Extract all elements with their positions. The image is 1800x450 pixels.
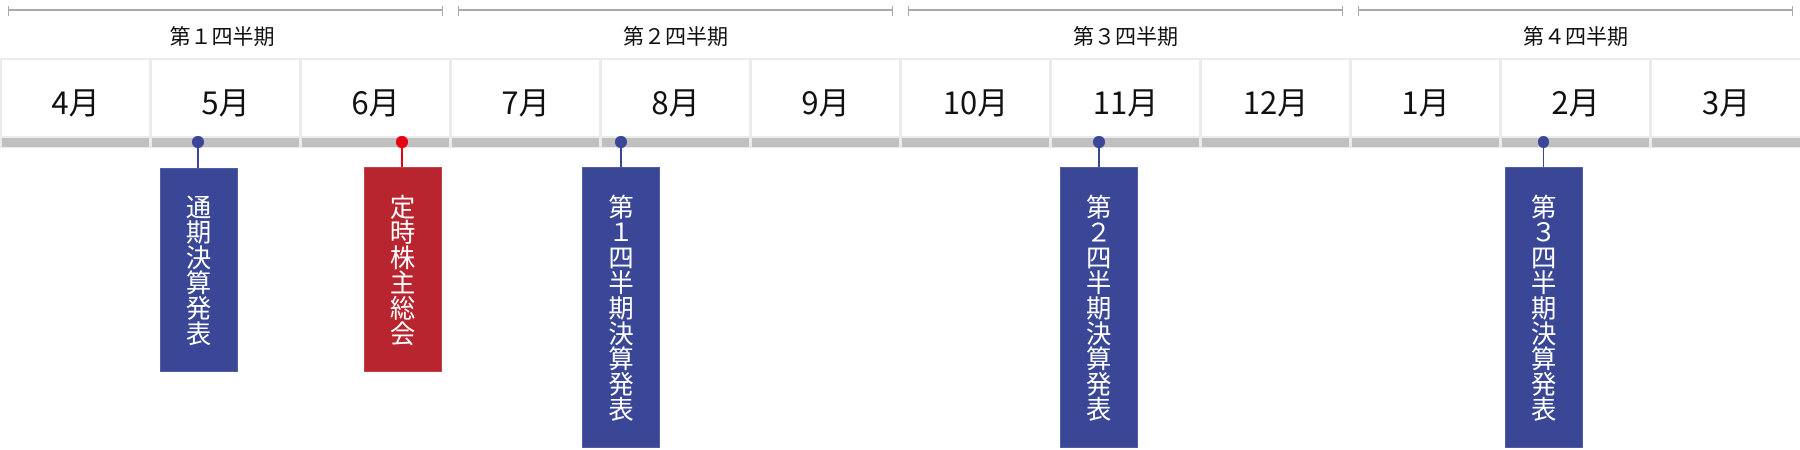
heading: third quarter: 第３四半期 (1073, 21, 1178, 51)
event tag: second quarter results (1060, 167, 1138, 448)
event tag: second quarter results: 第２四半期決算発表 (1081, 194, 1117, 421)
marker: February pin (1538, 136, 1549, 167)
bracket: third quarter (908, 6, 1343, 16)
month: January (1350, 58, 1502, 148)
event tag: first quarter results: 第１四半期決算発表 (603, 194, 639, 421)
month: April (0, 58, 152, 148)
heading: second quarter: 第２四半期 (623, 21, 728, 51)
month: February (1500, 58, 1652, 148)
month: July (450, 58, 602, 148)
month: July: 7月 (501, 78, 550, 123)
bracket: fourth quarter (1358, 6, 1793, 16)
month: August: 8月 (651, 78, 700, 123)
heading: first quarter: 第１四半期 (170, 21, 274, 51)
marker: August pin (615, 136, 627, 167)
month: February: 2月 (1551, 78, 1600, 123)
month: September (750, 58, 902, 148)
event tag: full-year results: 通期決算発表 (180, 194, 216, 345)
heading: fourth quarter: 第４四半期 (1523, 21, 1628, 51)
month: June: 6月 (351, 78, 400, 123)
month: April: 4月 (51, 78, 100, 123)
month: November: 11月 (1093, 78, 1158, 123)
marker: June pin (396, 136, 408, 167)
month: May (150, 58, 302, 148)
event tag: full-year results (160, 168, 238, 372)
bracket: second quarter (458, 6, 893, 16)
month: October (900, 58, 1052, 148)
month: October: 10月 (943, 78, 1008, 123)
event tag: third quarter results: 第３四半期決算発表 (1526, 194, 1562, 421)
month: September: 9月 (801, 78, 850, 123)
month: January: 1月 (1401, 78, 1450, 123)
month: March (1650, 58, 1800, 148)
marker: November pin (1093, 136, 1105, 167)
month: December (1200, 58, 1352, 148)
event tag: first quarter results (582, 167, 660, 448)
month: May: 5月 (201, 78, 250, 123)
event tag: annual shareholders meeting (364, 167, 442, 372)
event tag: annual shareholders meeting: 定時株主総会 (384, 194, 420, 345)
marker: May pin (192, 136, 204, 168)
month: November (1050, 58, 1202, 148)
month: August (600, 58, 752, 148)
month: December: 12月 (1243, 78, 1308, 123)
month: March: 3月 (1702, 78, 1750, 123)
event tag: third quarter results (1505, 167, 1583, 448)
month: June (300, 58, 452, 148)
bracket: first quarter (8, 6, 443, 16)
